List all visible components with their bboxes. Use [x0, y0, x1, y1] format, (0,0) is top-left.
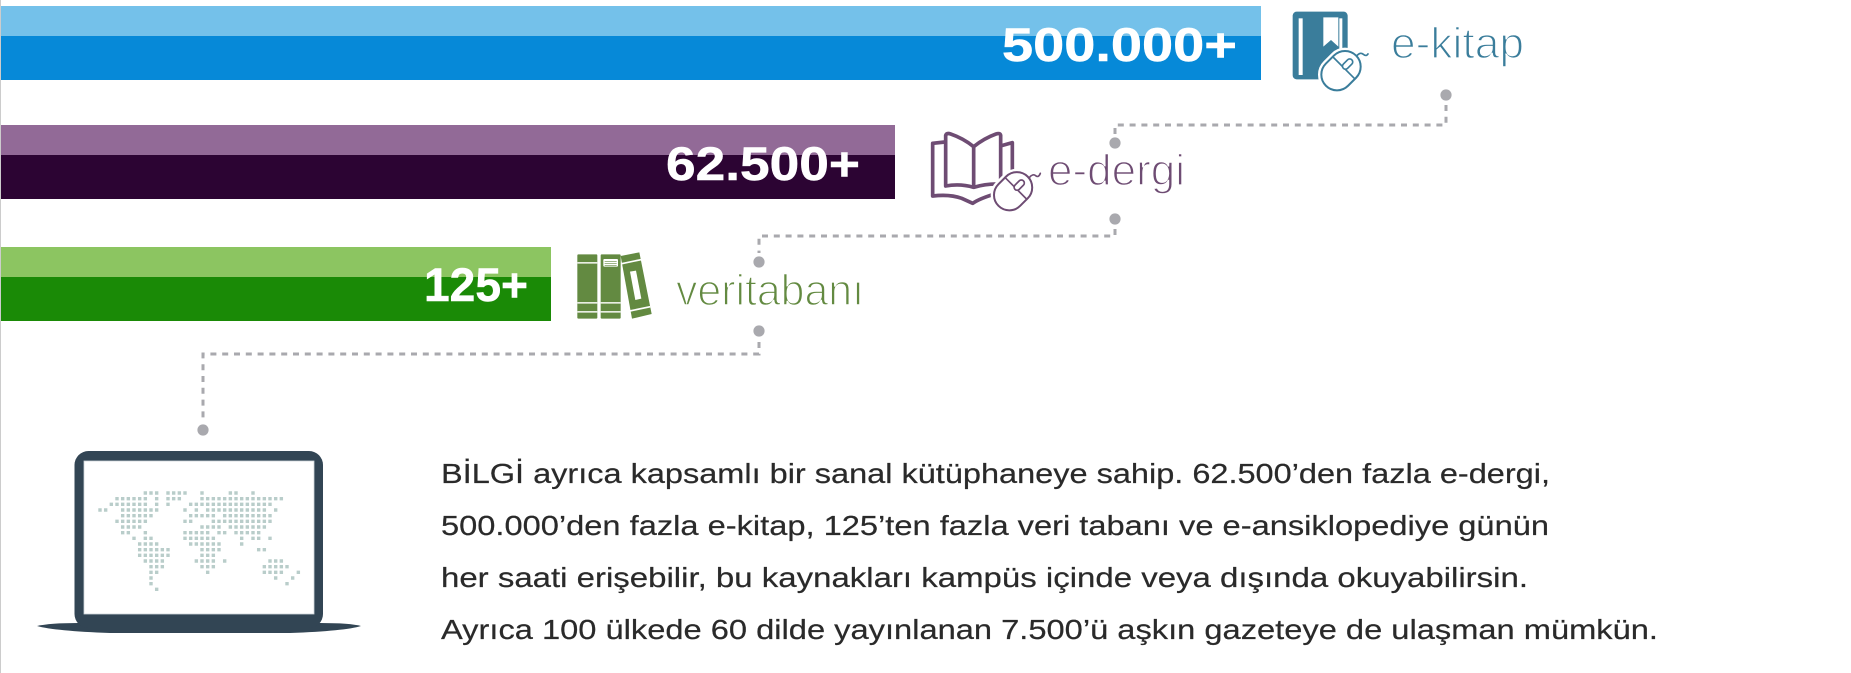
connector: veritabanı to laptop: [197, 325, 765, 436]
icon: three books: [577, 252, 652, 319]
bar: e-dergi 62.500+: 62.500+: [666, 137, 860, 190]
bar: e-kitap 500.000+: [1, 6, 1261, 80]
text block: description: her saati erişebilir, bu kaynakları kampüs içinde veya dışında okuyabilirsin.: [441, 562, 1528, 593]
label: e-dergi: e-dergi: [1048, 146, 1185, 195]
bar: e-dergi 62.500+: [1, 125, 895, 199]
text block: description: 500.000’den fazla e-kitap, 125’ten fazla veri tabanı ve e-ansiklopediye günün: [441, 510, 1549, 541]
icon: e-book with mouse: [1293, 12, 1368, 97]
bar: veritabanı 125+: [1, 247, 551, 321]
bar: e-kitap 500.000+: 500.000+: [1002, 18, 1237, 71]
text block: description: BİLGİ ayrıca kapsamlı bir sanal kütüphaneye sahip. 62.500’den fazla e-dergi,: [441, 458, 1550, 489]
label: veritabanı: veritabanı: [676, 266, 864, 315]
label: e-kitap: e-kitap: [1391, 19, 1524, 68]
connector: e-kitap to e-dergi: [1109, 89, 1452, 149]
icon: open magazine with mouse: [933, 134, 1040, 217]
icon: laptop with dotted world map: [37, 451, 361, 633]
bar: veritabanı 125+: 125+: [424, 258, 528, 311]
text block: description: Ayrıca 100 ülkede 60 dilde yayınlanan 7.500’ü aşkın gazeteye de ulaşman mümkün.: [441, 614, 1658, 645]
text block: description: [441, 458, 1658, 645]
connector: e-dergi to veritabanı: [753, 213, 1121, 268]
